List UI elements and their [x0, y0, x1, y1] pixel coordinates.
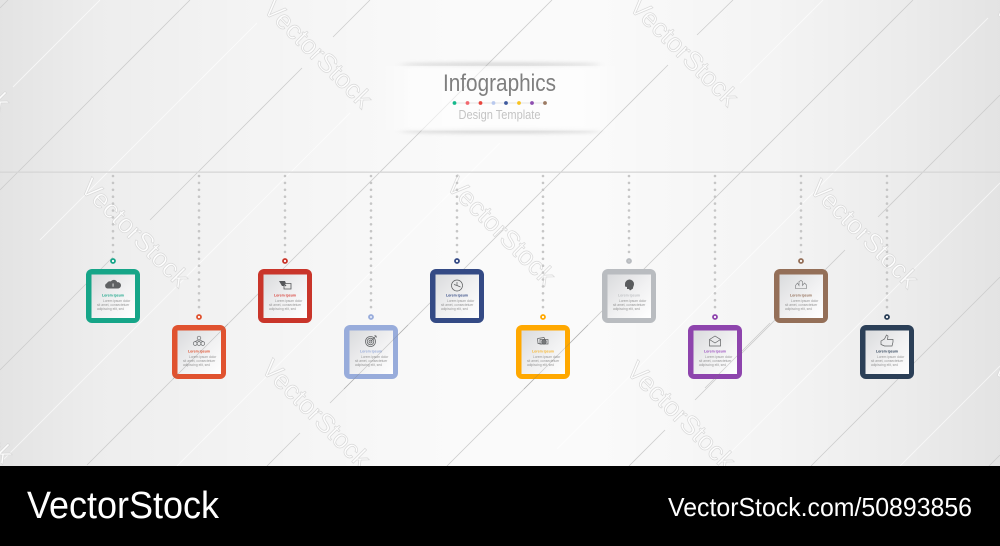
label text: Lorem ipsum: [360, 348, 382, 354]
step 6: amber card: sit amet, consectetuer: [527, 359, 560, 363]
label text: Lorem ipsum: [188, 348, 210, 354]
title panel: [380, 62, 620, 134]
step 5: navy card: [430, 259, 484, 323]
dotted connector lines: [113, 176, 887, 312]
label text: Lorem ipsum: [876, 348, 898, 354]
label text: Lorem ipsum: [704, 348, 726, 354]
label text: Lorem ipsum: [102, 292, 124, 298]
step 2: orange-red card: Lorem ipsum dolor: [189, 355, 217, 359]
step 10: dark slate card: Lorem ipsum dolor: [877, 355, 905, 359]
label text: Lorem ipsum: [532, 348, 554, 354]
step 4: periwinkle card: [344, 315, 398, 379]
step 8: purple card: sit amet, consectetuer: [699, 359, 732, 363]
step 10: dark slate card: adipiscing elit, sed: [871, 363, 898, 367]
icon: clock: [452, 280, 462, 291]
step 9: brown card: [774, 259, 828, 323]
step 9: brown card: adipiscing elit, sed: [785, 307, 812, 311]
step 9: brown card: Lorem ipsum dolor: [791, 299, 819, 303]
step 5: navy card: adipiscing elit, sed: [441, 307, 468, 311]
step 6: amber card: adipiscing elit, sed: [527, 363, 554, 367]
icon: overlapping windows: [279, 281, 291, 289]
watermark: VectorStock repeated: VectorStock: [256, 353, 377, 475]
icon: cloud: [105, 280, 121, 288]
step 1: teal card: [86, 259, 140, 323]
step 3: red card: sit amet, consectetuer: [269, 303, 302, 307]
step 3: red card: adipiscing elit, sed: [269, 307, 296, 311]
step 4: periwinkle card: Lorem ipsum dolor: [361, 355, 389, 359]
step 8: purple card: adipiscing elit, sed: [699, 363, 726, 367]
footer logo text: VectorStock: [27, 485, 220, 527]
step 6: amber card: [516, 315, 570, 379]
icon: thumbs up: [881, 335, 893, 346]
watermark: VectorStock repeated: VectorStock: [441, 170, 562, 292]
icon: open envelope: [710, 336, 720, 346]
step 7: grey card: adipiscing elit, sed: [613, 307, 640, 311]
step 5: navy card: sit amet, consectetuer: [441, 303, 474, 307]
watermark: VectorStock repeated: VectorStock: [804, 173, 925, 295]
icon: org chart: [193, 336, 205, 345]
step 2: orange-red card: adipiscing elit, sed: [183, 363, 210, 367]
label text: Lorem ipsum: [274, 292, 296, 298]
step 1: teal card: Lorem ipsum dolor: [103, 299, 131, 303]
icon: target: [366, 336, 376, 346]
step 3: red card: Lorem ipsum dolor: [275, 299, 303, 303]
label text: Lorem ipsum: [790, 292, 812, 298]
step 1: teal card: adipiscing elit, sed: [97, 307, 124, 311]
step 8: purple card: [688, 315, 742, 379]
step 2: orange-red card: sit amet, consectetuer: [183, 359, 216, 363]
title dot row: [453, 101, 547, 105]
label text: Lorem ipsum: [618, 292, 640, 298]
step 10: dark slate card: sit amet, consectetuer: [871, 359, 904, 363]
horizontal timeline bar: [0, 172, 1000, 173]
step 3: red card: [258, 259, 312, 323]
title text: Infographics: [443, 70, 556, 97]
watermark: VectorStock repeated: VectorStock: [75, 172, 196, 294]
step 2: orange-red card: [172, 315, 226, 379]
step 7: grey card: Lorem ipsum dolor: [619, 299, 647, 303]
step 10: dark slate card: [860, 315, 914, 379]
step 7: grey card: [602, 259, 656, 323]
step 7: grey card: sit amet, consectetuer: [613, 303, 646, 307]
icon: hand: [796, 280, 806, 288]
step 5: navy card: Lorem ipsum dolor: [447, 299, 475, 303]
step 4: periwinkle card: sit amet, consectetuer: [355, 359, 388, 363]
step 8: purple card: Lorem ipsum dolor: [705, 355, 733, 359]
footer bar: [0, 466, 1000, 546]
icon: banknotes and coin: [538, 338, 548, 344]
step 9: brown card: sit amet, consectetuer: [785, 303, 818, 307]
step 1: teal card: sit amet, consectetuer: [97, 303, 130, 307]
watermark: VectorStock repeated: VectorStock: [621, 355, 742, 477]
label text: Lorem ipsum: [446, 292, 468, 298]
icon: head silhouette: [625, 280, 634, 290]
subtitle text: Design Template: [458, 107, 540, 122]
step 4: periwinkle card: adipiscing elit, sed: [355, 363, 382, 367]
step 6: amber card: Lorem ipsum dolor: [533, 355, 561, 359]
footer url text: VectorStock.com/50893856: [668, 492, 972, 522]
